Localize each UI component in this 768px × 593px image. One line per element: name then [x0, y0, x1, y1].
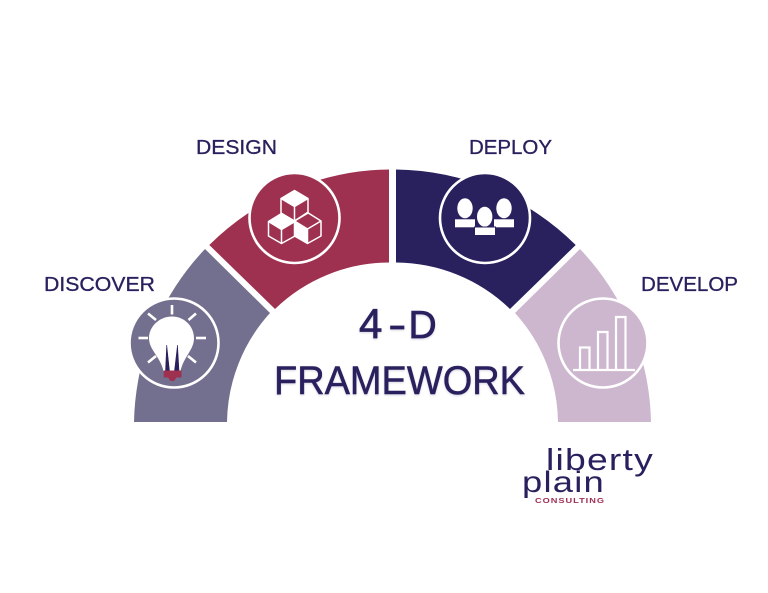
panel: discover [130, 249, 270, 422]
arch segment: develop [515, 249, 651, 422]
title [274, 300, 525, 403]
arch segment: design [209, 170, 389, 309]
label: develop: DEVELOP [641, 274, 738, 296]
label: design: DESIGN [196, 137, 277, 159]
arch segment: deploy [396, 170, 576, 309]
panel: develop [515, 249, 651, 422]
logo: liberty plain consulting: plain [522, 466, 605, 499]
icon: three people [440, 173, 530, 263]
title: - [388, 304, 406, 347]
icon: light bulb [130, 298, 218, 388]
logo: liberty plain consulting: CONSULTING [535, 496, 605, 505]
icon: stacked cubes [250, 173, 340, 263]
arch segment: discover [134, 249, 270, 422]
title: FRAMEWORK [274, 359, 525, 403]
icon: bar chart [558, 298, 648, 388]
logo: liberty plain consulting: liberty [546, 442, 654, 477]
title: D [408, 304, 437, 347]
panel: deploy [396, 170, 576, 309]
logo: liberty plain consulting [522, 442, 654, 505]
panel: design [209, 170, 389, 309]
label: deploy: DEPLOY [469, 137, 552, 159]
label: discover: DISCOVER [44, 274, 155, 296]
title: 4 [359, 300, 382, 347]
